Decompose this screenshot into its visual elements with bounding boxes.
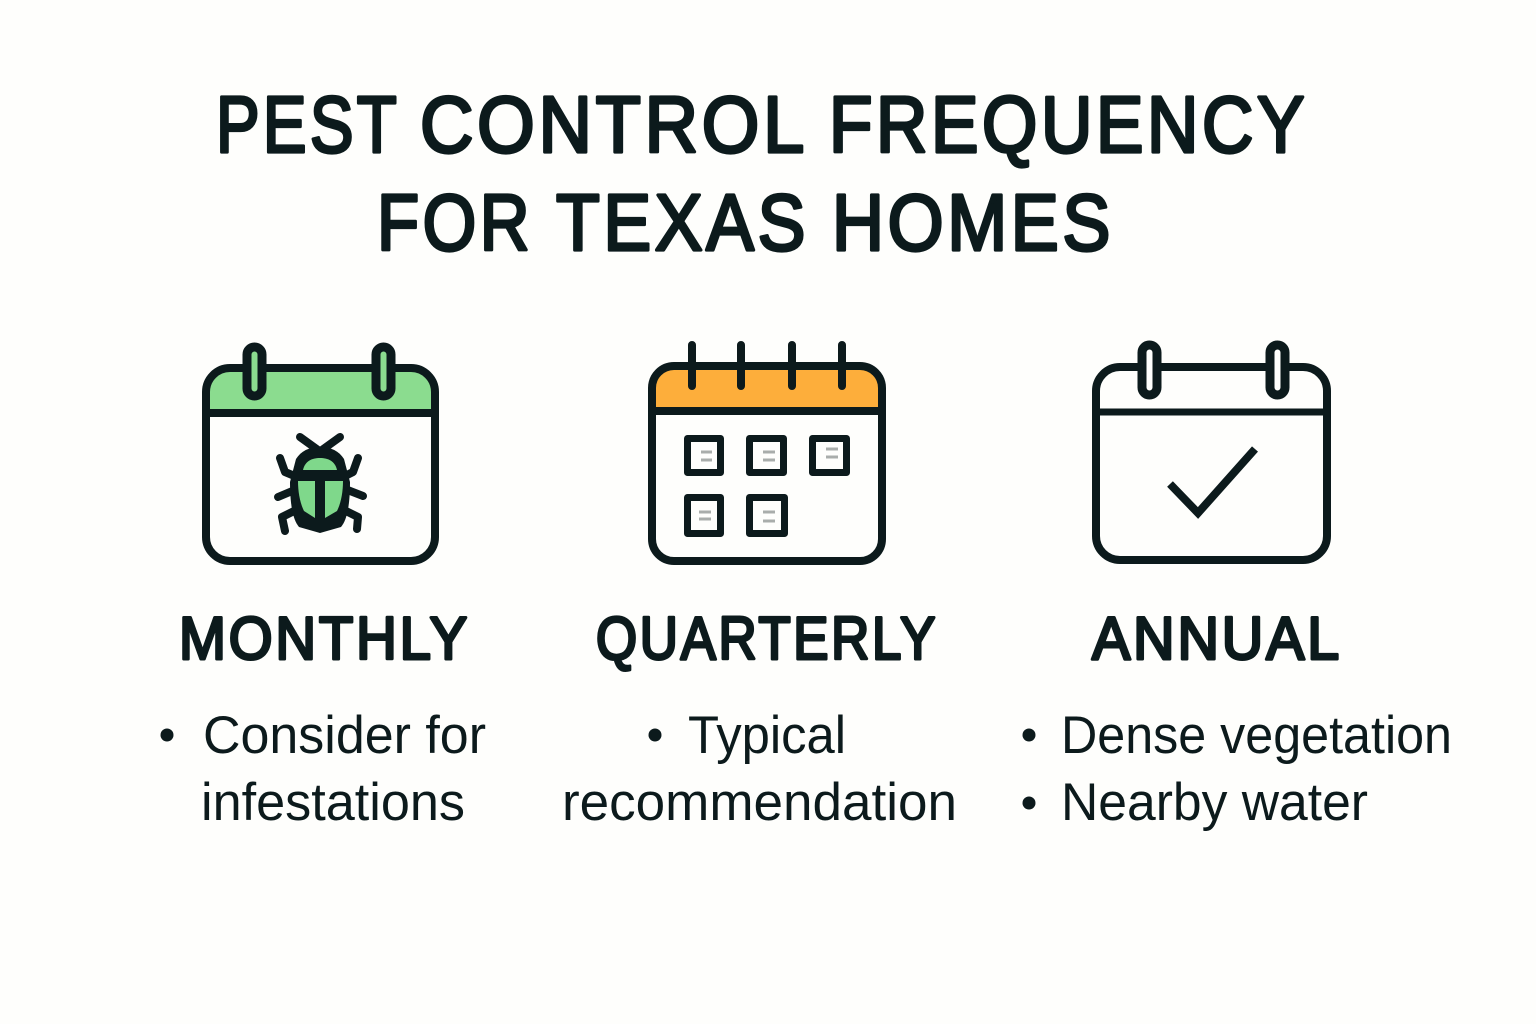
title: TEXAS — [556, 178, 809, 267]
heading: monthly: MONTHLY — [179, 605, 470, 672]
title: CONTROL — [420, 80, 808, 169]
panel: annual — [1022, 345, 1452, 832]
quarterly text block — [562, 706, 957, 832]
annual text block: Dense vegetation — [1061, 706, 1452, 765]
panel: monthly — [160, 347, 486, 832]
monthly text block — [160, 706, 486, 832]
title: HOMES — [832, 178, 1114, 267]
title: FOR — [377, 178, 533, 267]
title — [216, 80, 1308, 267]
title: FREQUENCY — [829, 80, 1308, 169]
annual text block: Nearby water — [1061, 773, 1368, 832]
quarterly text block: recommendation — [562, 773, 957, 832]
quarterly text block: Typical — [688, 706, 846, 765]
heading: annual: ANNUAL — [1092, 605, 1342, 672]
title: PEST — [216, 80, 400, 169]
panel: quarterly — [562, 345, 957, 832]
icon: calendar with check mark — [1096, 345, 1327, 560]
heading: quarterly: QUARTERLY — [596, 605, 938, 672]
monthly text block: Consider for — [203, 706, 486, 765]
icon: calendar with date squares — [652, 345, 882, 561]
icon: calendar with bug — [206, 347, 435, 561]
annual text block — [1022, 706, 1452, 832]
monthly text block: infestations — [201, 773, 465, 832]
